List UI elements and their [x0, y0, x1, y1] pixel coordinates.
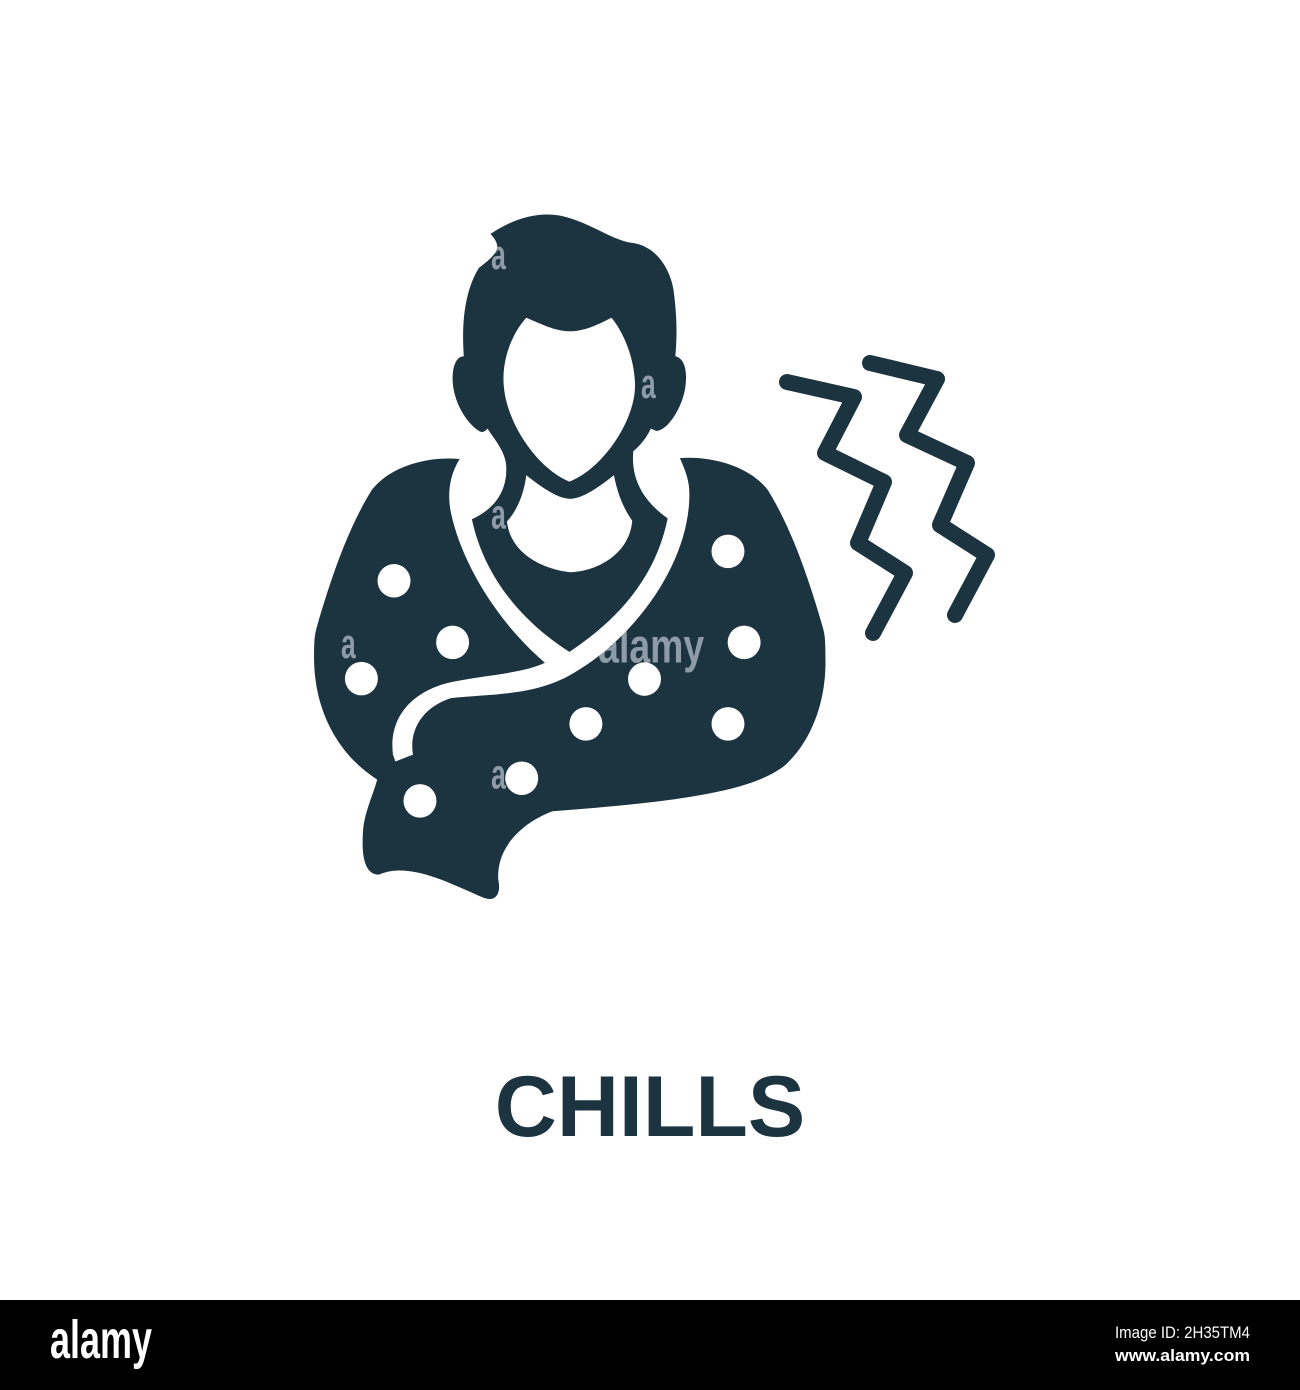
head, hair, neck and chest [453, 214, 686, 652]
watermarks: a [491, 231, 506, 278]
footer logo: alamy [50, 1310, 152, 1370]
blanket [314, 458, 825, 899]
neck cutout [507, 475, 632, 572]
footer bar [0, 1300, 1300, 1390]
watermarks: a [641, 360, 656, 407]
watermarks [341, 231, 704, 798]
icon: shiver zigzag lines [787, 363, 987, 633]
icon: person wrapped in blanket [314, 214, 825, 899]
website: www.alamy.com [1114, 1346, 1250, 1365]
watermarks: a [491, 751, 506, 798]
title: CHILLS [495, 1059, 805, 1155]
image id: Image ID: 2H35TM4 [1115, 1323, 1250, 1342]
watermarks: a [491, 491, 506, 538]
face cutout [503, 318, 635, 482]
blanket dots [345, 535, 761, 818]
watermarks: alamy [598, 620, 704, 674]
watermarks: a [341, 620, 356, 667]
